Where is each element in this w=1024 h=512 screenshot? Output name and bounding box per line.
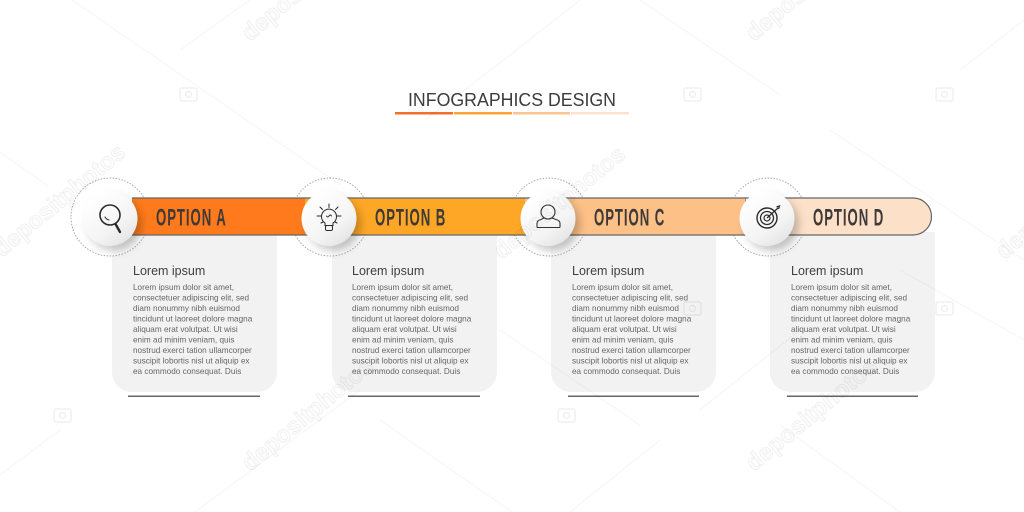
watermark text: depositphotos [237, 353, 379, 477]
panel: option B card: Lorem ipsum [352, 264, 424, 278]
panel: option A card: suscipit lobortis nisl ut aliquip ex [133, 356, 250, 366]
panel: option D card: enim ad minim veniam, quis [791, 336, 892, 344]
panel: option C card: consectetuer adipiscing elit, sed [572, 294, 689, 302]
watermark text: depositphotos [489, 141, 631, 265]
icon: target in disc [740, 191, 799, 251]
panel: option C card: Lorem ipsum [572, 264, 644, 278]
dashed ring: option D [729, 178, 807, 256]
panel: option D card: Lorem ipsum dolor sit amet, [791, 283, 892, 292]
panel: option C card: suscipit lobortis nisl ut aliquip ex [572, 356, 688, 366]
panel: option B card: ea commodo consequat. Duis [352, 367, 460, 376]
panel: option C card: diam nonummy nibh euismod [572, 304, 679, 313]
panel: option D card [770, 232, 935, 397]
panel: option B card: suscipit lobortis nisl ut aliquip ex [352, 356, 468, 366]
panel: option B card: consectetuer adipiscing elit, sed [352, 294, 469, 302]
panel: option B card: diam nonummy nibh euismod [352, 304, 459, 313]
band: option C: OPTION C [594, 204, 665, 232]
panel: option A card: tincidunt ut laoreet dolore magna [133, 314, 253, 324]
panel: option D card: tincidunt ut laoreet dolore magna [791, 314, 911, 324]
panel: option B card: aliquam erat volutpat. Ut wisi [352, 325, 457, 334]
panel: option D card: ea commodo consequat. Duis [791, 367, 899, 376]
panel: option D card: Lorem ipsum [791, 264, 863, 278]
band: option B [305, 198, 525, 235]
band: option A [132, 198, 305, 235]
panel: option A card: nostrud exerci tation ullamcorper [133, 346, 252, 355]
panel: option A card: Lorem ipsum dolor sit amet, [133, 283, 234, 292]
panel: option A card: aliquam erat volutpat. Ut wisi [133, 325, 238, 334]
panel: option D card: consectetuer adipiscing elit, sed [791, 294, 908, 302]
icon: magnifier in disc [82, 191, 142, 251]
dashed ring: option B [291, 178, 369, 256]
panel: option C card: ea commodo consequat. Duis [572, 367, 680, 376]
dashed ring: option C [510, 178, 588, 256]
panel: option A card [112, 232, 277, 397]
panel: option C card: aliquam erat volutpat. Ut wisi [572, 325, 677, 334]
panel: option B card: nostrud exerci tation ullamcorper [352, 346, 471, 355]
band: option B: OPTION B [375, 204, 446, 232]
band: option A: OPTION A [156, 204, 227, 232]
panel: option A card: enim ad minim veniam, quis [133, 336, 234, 344]
panel: option B card [332, 232, 497, 397]
band: option D: OPTION D [813, 204, 884, 232]
panel: option D card: diam nonummy nibh euismod [791, 304, 898, 313]
panel: option C card [551, 232, 716, 397]
band: option C [525, 198, 745, 235]
watermark text: depositphotos [741, 353, 883, 477]
panel: option C card: tincidunt ut laoreet dolore magna [572, 314, 692, 324]
panel: option A card: consectetuer adipiscing elit, sed [133, 294, 250, 302]
panel: option C card: Lorem ipsum dolor sit amet, [572, 283, 673, 292]
band: option D [745, 198, 932, 235]
title: INFOGRAPHICS DESIGN [408, 89, 616, 110]
panel: option C card: enim ad minim veniam, quis [572, 336, 673, 344]
panel: option C card: nostrud exerci tation ullamcorper [572, 346, 691, 355]
icon: person in disc [520, 191, 580, 251]
watermark camera icons [54, 88, 953, 422]
panel: option A card: diam nonummy nibh euismod [133, 304, 240, 313]
panel: option A card: Lorem ipsum [133, 264, 205, 278]
icon: light bulb in disc [302, 191, 361, 251]
panel: option B card: enim ad minim veniam, quis [352, 336, 453, 344]
panel: option B card: Lorem ipsum dolor sit amet, [352, 283, 453, 292]
panel: option D card: suscipit lobortis nisl ut aliquip ex [791, 356, 908, 366]
dashed ring: option A [71, 178, 149, 256]
panel: option D card: nostrud exerci tation ullamcorper [791, 346, 910, 355]
panel: option A card: ea commodo consequat. Duis [133, 367, 241, 376]
panel: option D card: aliquam erat volutpat. Ut wisi [791, 325, 896, 334]
panel: option B card: tincidunt ut laoreet dolore magna [352, 314, 472, 324]
